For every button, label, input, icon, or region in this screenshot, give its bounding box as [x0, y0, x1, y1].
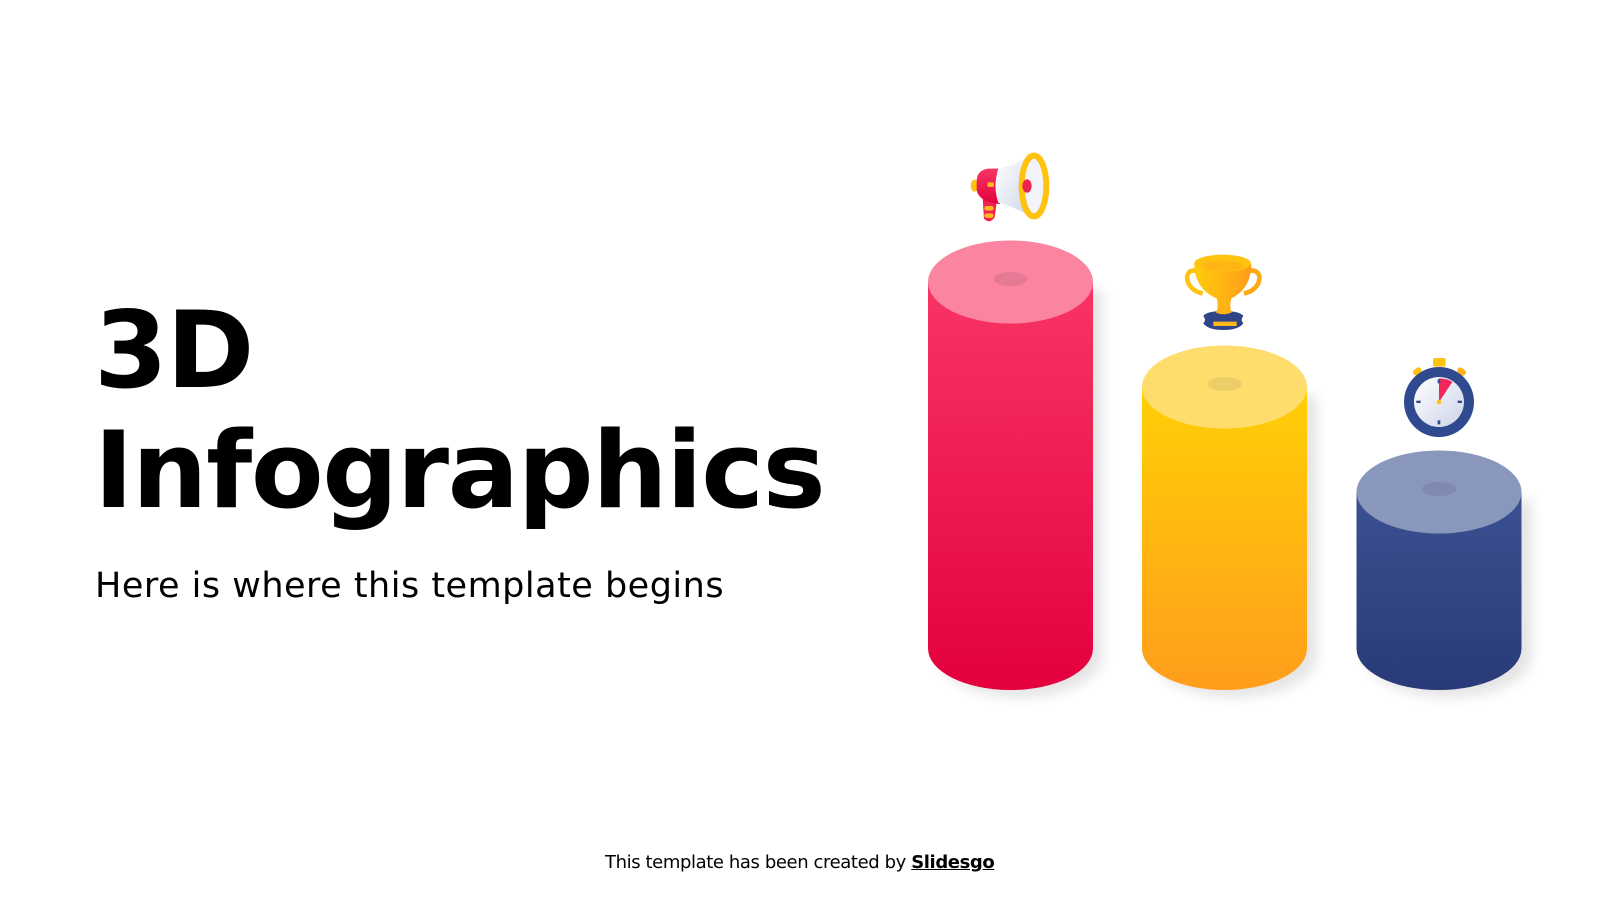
icon: stopwatch [1404, 358, 1474, 437]
red cylinder [928, 240, 1103, 697]
title: Infographics [94, 409, 824, 532]
title: 3D [94, 289, 253, 412]
subtitle: Here is where this template begins [95, 566, 724, 606]
icon: trophy [1187, 255, 1259, 330]
navy cylinder [1356, 450, 1532, 698]
footer credit: This template has been created by Slidesgo [605, 852, 994, 873]
title [94, 289, 824, 532]
icon: megaphone [971, 153, 1046, 221]
yellow cylinder [1142, 346, 1317, 697]
